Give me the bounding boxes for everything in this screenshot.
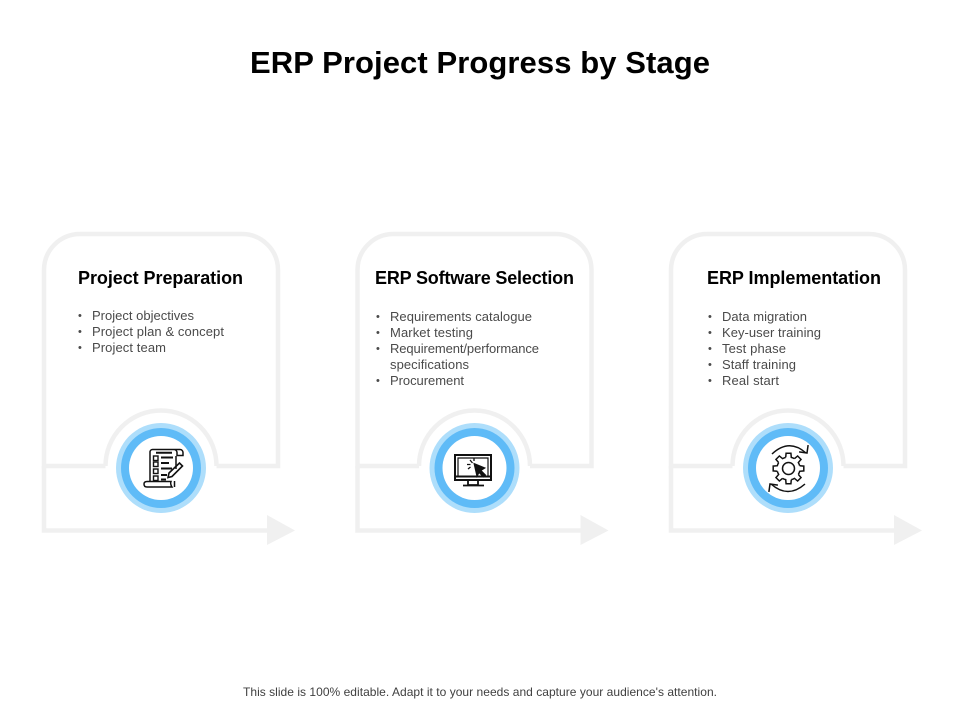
bullet list: • (376, 343, 380, 355)
heading: Project Preparation (78, 268, 243, 288)
bullet list: Requirement/performance (390, 341, 539, 356)
bullet list: • (376, 327, 380, 339)
bullet list: • (78, 310, 82, 322)
heading: ERP Implementation (707, 268, 881, 288)
bullet list: Procurement (390, 373, 464, 388)
panel: erp software selection (358, 234, 608, 545)
bullet list: Data migration (722, 309, 807, 324)
panel: project preparation (44, 234, 295, 545)
bullet list: • (708, 327, 712, 339)
bullet list (708, 309, 821, 388)
icon: checklist scroll (116, 423, 206, 513)
bullet list: • (708, 343, 712, 355)
icon: gear with cycle arrows (743, 423, 833, 513)
bullet list: Project objectives (92, 308, 194, 323)
bullet list: Staff training (722, 357, 796, 372)
bullet list: specifications (390, 357, 470, 372)
card outline and arrow (671, 234, 922, 545)
bullet list: Test phase (722, 341, 786, 356)
bullet list: Project plan & concept (92, 324, 224, 339)
bullet list: • (78, 326, 82, 338)
bullet list: • (708, 375, 712, 387)
bullet list (376, 309, 539, 388)
bullet list: Key-user training (722, 325, 821, 340)
title: ERP Project Progress by Stage (250, 45, 710, 80)
card outline and arrow (358, 234, 608, 545)
footer note: This slide is 100% editable. Adapt it to your needs and capture your audience's attention. (243, 685, 717, 699)
bullet list: Market testing (390, 325, 473, 340)
bullet list: • (708, 311, 712, 323)
bullet list: Project team (92, 340, 166, 355)
bullet list: • (376, 375, 380, 387)
card outline and arrow (44, 234, 295, 545)
bullet list: Real start (722, 373, 779, 388)
panel: erp implementation (671, 234, 922, 545)
bullet list: • (78, 342, 82, 354)
heading: ERP Software Selection (375, 268, 574, 288)
bullet list: • (708, 359, 712, 371)
icon: monitor with cursor (430, 423, 520, 513)
bullet list: Requirements catalogue (390, 309, 532, 324)
bullet list: • (376, 311, 380, 323)
bullet list (78, 308, 224, 355)
